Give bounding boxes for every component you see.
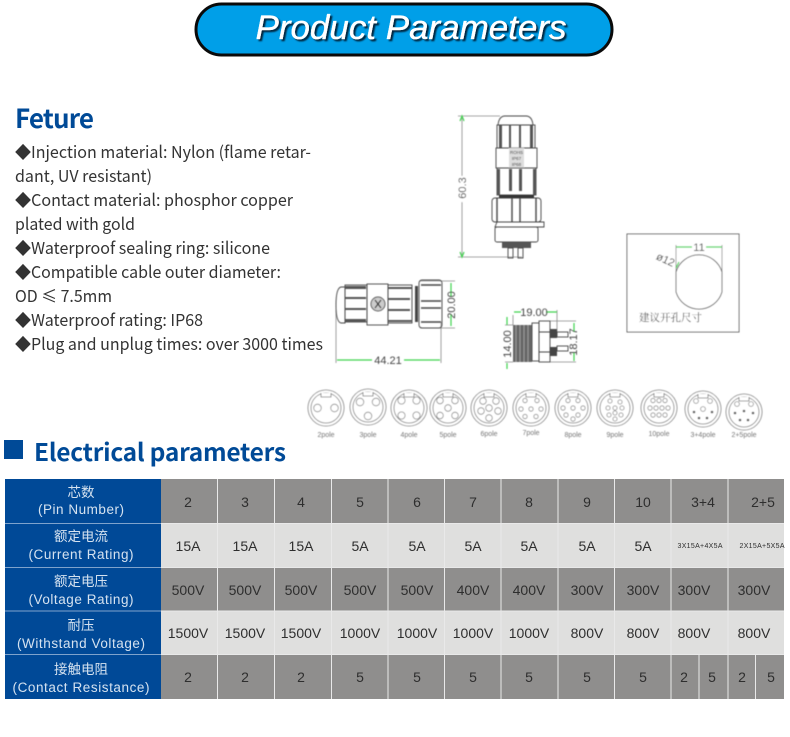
row: current rating: 5A: [351, 538, 369, 554]
vertical connector drawing: [454, 116, 544, 258]
side view connector drawing: 44.21: [374, 355, 402, 367]
row: pin number: 10: [635, 494, 651, 510]
pole: 3: [350, 389, 386, 439]
rear connector drawing: 14.00: [502, 330, 514, 358]
pole: 3+4: 3+4pole: [690, 432, 716, 439]
table row header column: (Voltage Rating): [28, 592, 134, 607]
row: contact resistance: 2: [184, 669, 192, 685]
row: pin number: 2: [184, 494, 192, 510]
electrical parameters table: [5, 479, 785, 699]
row: voltage rating: 300V: [627, 582, 660, 598]
row: current rating: 5A: [520, 538, 538, 554]
side view connector drawing: 20.00: [446, 291, 458, 319]
pole: 10: [641, 390, 677, 438]
row: voltage rating: 500V: [172, 582, 205, 598]
row: pin number: 7: [469, 494, 477, 510]
feature list: dant, UV resistant): [15, 163, 152, 187]
pole: 3+4: [685, 391, 721, 439]
table row header column: 耐压: [68, 618, 94, 633]
table row header column: (Withstand Voltage): [17, 636, 145, 651]
row: contact resistance: 5: [356, 669, 364, 685]
row: contact resistance: 2: [738, 669, 746, 685]
pole: 9: 9pole: [606, 432, 624, 439]
pole: 2: [308, 390, 344, 439]
row: current rating: 3X15A+4X5A: [678, 543, 723, 550]
pole: 9: [597, 390, 633, 439]
vertical connector drawing: IP67: [512, 156, 522, 161]
row: current rating: 15A: [289, 538, 314, 554]
table row header column: 额定电流: [54, 529, 108, 544]
title banner: Product Parameters: [256, 9, 566, 47]
row: voltage rating: 300V: [571, 582, 604, 598]
row: current rating: 2X15A+5X5A: [740, 543, 785, 550]
row: contact resistance: 2: [297, 669, 305, 685]
table row header column: [5, 479, 161, 699]
rear connector drawing: [502, 307, 580, 369]
row: pin number: 6: [413, 494, 421, 510]
feature list: ◆Contact material: phosphor copper: [15, 187, 294, 211]
row: contact resistance: [184, 669, 775, 685]
pole layouts row: [308, 389, 762, 439]
row: withstand voltage: 800V: [738, 625, 771, 641]
row: withstand voltage: [168, 625, 771, 641]
row: contact resistance: 5: [469, 669, 477, 685]
row: withstand voltage: 1500V: [225, 625, 266, 641]
feature list: ◆Waterproof sealing ring: silicone: [15, 235, 270, 259]
row: voltage rating: 300V: [678, 582, 711, 598]
row: contact resistance: 5: [639, 669, 647, 685]
row: voltage rating: 500V: [401, 582, 434, 598]
row: current rating: 15A: [176, 538, 201, 554]
pole: 8: [555, 390, 591, 439]
table row header column: (Current Rating): [28, 547, 134, 562]
table row header column: (Pin Number): [38, 502, 124, 517]
pole: 2+5: [726, 394, 762, 439]
row: current rating: 5A: [408, 538, 426, 554]
row: voltage rating: 500V: [344, 582, 377, 598]
row: withstand voltage: 800V: [627, 625, 660, 641]
row: voltage rating: 400V: [457, 582, 490, 598]
table row header column: 接触电阻: [54, 661, 108, 677]
row: pin number: [184, 494, 775, 510]
vertical connector drawing: ROHS: [510, 150, 523, 155]
feature list: plated with gold: [15, 211, 135, 235]
row: contact resistance: 5: [525, 669, 533, 685]
row: voltage rating: [172, 582, 771, 598]
pole: 7: 7pole: [522, 430, 540, 437]
pole: 6: [471, 390, 507, 438]
row: current rating: 5A: [464, 538, 482, 554]
panel cutout drawing: 建议开孔尺寸: [639, 310, 702, 325]
row: withstand voltage: 1500V: [168, 625, 209, 641]
row: voltage rating: 400V: [513, 582, 546, 598]
row: pin number: 8: [525, 494, 533, 510]
feature list: [15, 139, 323, 355]
title banner: [196, 4, 612, 55]
row: pin number: 4: [297, 494, 305, 510]
row: current rating: 5A: [634, 538, 652, 554]
row: pin number: 2+5: [751, 494, 775, 510]
row: current rating: 5A: [578, 538, 596, 554]
pole: 4: 4pole: [400, 432, 418, 439]
rear connector drawing: 18.17: [568, 328, 580, 356]
row: withstand voltage: 1000V: [453, 625, 494, 641]
row: contact resistance: 5: [767, 669, 775, 685]
row: contact resistance: 2: [680, 669, 688, 685]
side view connector drawing: [336, 280, 458, 367]
feature list: OD ≤ 7.5mm: [15, 283, 112, 307]
pole: 5: 5pole: [439, 432, 457, 439]
row: pin number: 5: [356, 494, 364, 510]
table cell backgrounds: [161, 479, 784, 699]
pole: 6: 6pole: [480, 431, 498, 438]
row: contact resistance: 5: [583, 669, 591, 685]
rear connector drawing: 19.00: [520, 307, 548, 319]
table row header column: 芯数: [68, 485, 95, 500]
row: contact resistance: 5: [708, 669, 716, 685]
electrical parameters heading: Electrical parameters: [34, 434, 286, 469]
row: pin number: 3+4: [691, 494, 715, 510]
feature list: ◆Plug and unplug times: over 3000 times: [15, 331, 323, 355]
row: voltage rating: 300V: [738, 582, 771, 598]
row: pin number: 9: [583, 494, 591, 510]
pole: 4: [391, 390, 427, 439]
table row header column: (Contact Resistance): [12, 680, 150, 695]
row: contact resistance: 5: [413, 669, 421, 685]
row: withstand voltage: 1000V: [509, 625, 550, 641]
pole: 3: 3pole: [359, 432, 377, 439]
vertical connector drawing: 60.3: [457, 177, 469, 199]
row: voltage rating: 500V: [285, 582, 318, 598]
feature list: ◆Waterproof rating: IP68: [15, 307, 203, 331]
pole: 10: 10pole: [648, 431, 670, 438]
table row header column: 额定电压: [54, 574, 108, 589]
row: contact resistance: 2: [241, 669, 249, 685]
row: withstand voltage: 1500V: [281, 625, 322, 641]
row: withstand voltage: 1000V: [340, 625, 381, 641]
vertical connector drawing: IP68: [512, 162, 522, 167]
pole: 8: 8pole: [564, 432, 582, 439]
panel cutout drawing: 11: [693, 242, 705, 254]
row: withstand voltage: 800V: [571, 625, 604, 641]
pole: 2: 2pole: [317, 432, 335, 439]
feature section heading: Feture: [15, 99, 94, 136]
row: withstand voltage: 1000V: [397, 625, 438, 641]
pole: 5: [430, 390, 466, 439]
pole: 7: [513, 390, 549, 437]
row: withstand voltage: 800V: [678, 625, 711, 641]
panel cutout drawing: ø12: [654, 251, 676, 270]
row: current rating: 15A: [233, 538, 258, 554]
feature list: ◆Injection material: Nylon (flame retar-: [15, 139, 311, 163]
row: voltage rating: 500V: [229, 582, 262, 598]
feature list: ◆Compatible cable outer diameter:: [15, 259, 281, 283]
row: current rating: [176, 538, 785, 554]
panel cutout drawing: [627, 234, 739, 332]
pole: 2+5: 2+5pole: [731, 432, 757, 439]
row: pin number: 3: [241, 494, 249, 510]
